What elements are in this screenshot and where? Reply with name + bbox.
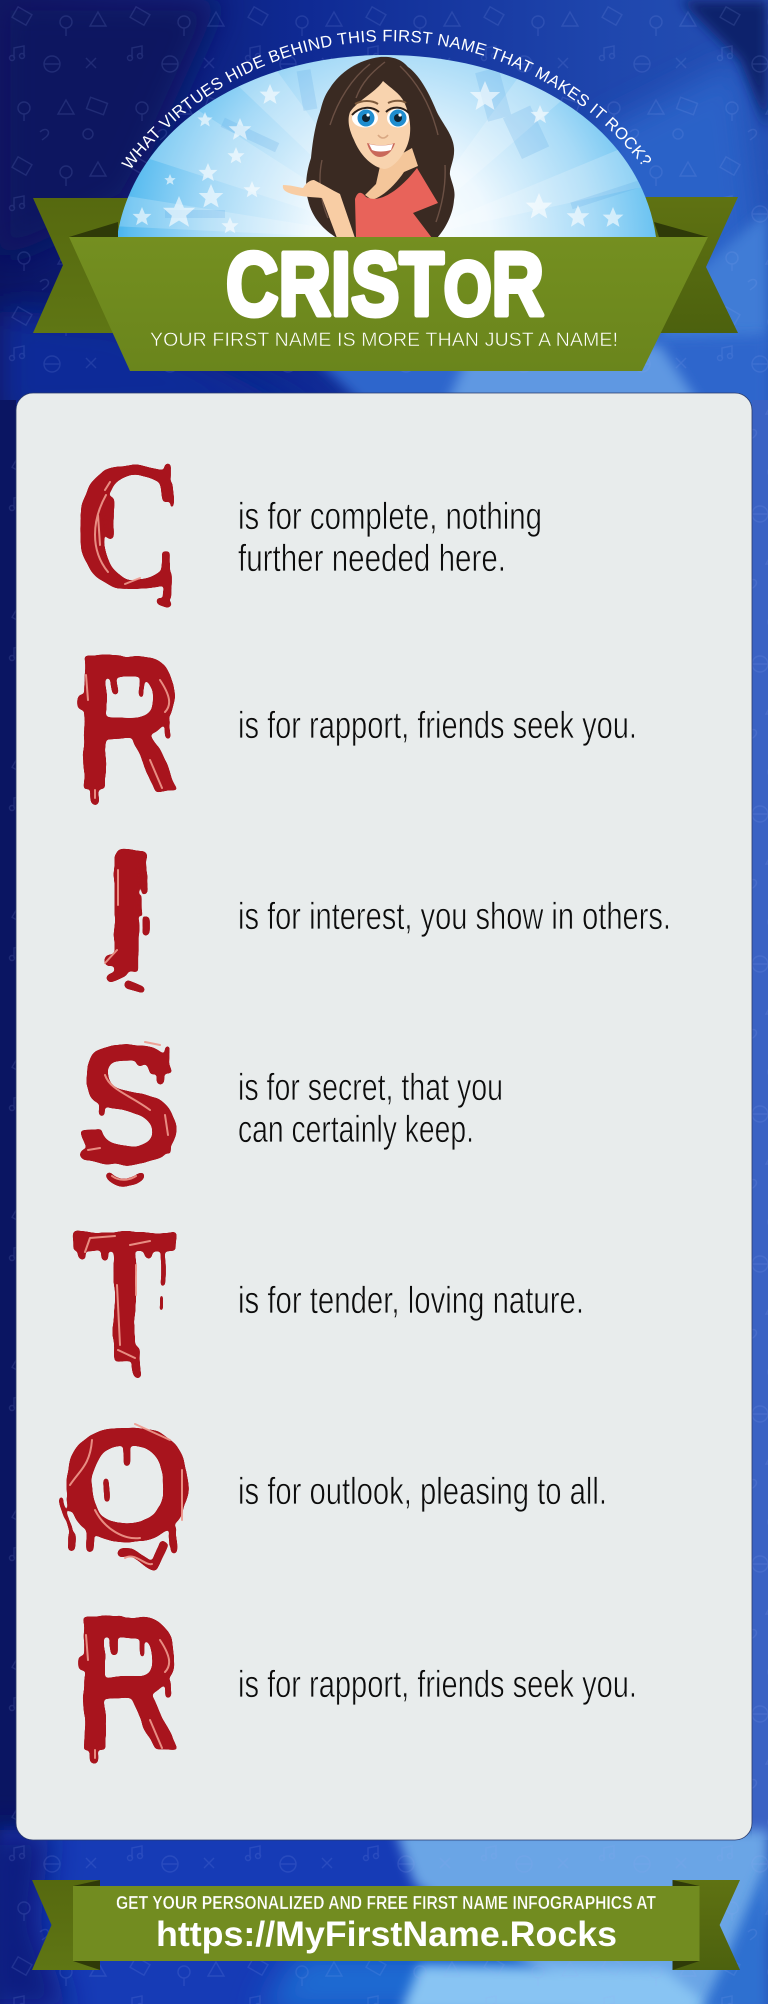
letter R: R (74, 614, 182, 831)
subtitle: YOUR FIRST NAME IS MORE THAN JUST A NAME! (150, 329, 618, 351)
text (238, 496, 542, 580)
text: is for secret, that you (238, 1067, 503, 1109)
footer url: https://MyFirstName.Rocks (156, 1915, 617, 1954)
ribbon folds (69, 222, 118, 237)
arm and hand (283, 180, 355, 238)
panel background (16, 393, 752, 1840)
right ribbon tail (620, 197, 738, 333)
banner band (69, 237, 708, 371)
left ribbon tail (33, 198, 150, 333)
nose (378, 135, 388, 138)
name title: CRISTOR (226, 235, 544, 335)
row: R (74, 614, 637, 831)
footer ribbon (32, 1880, 740, 1970)
sunburst dome (118, 55, 656, 237)
hair (306, 57, 455, 238)
row: S (76, 1008, 503, 1199)
footer band (73, 1886, 700, 1961)
text: is for rapport, friends seek you. (238, 1664, 637, 1706)
row: T (72, 1196, 584, 1399)
text: can certainly keep. (238, 1109, 474, 1151)
letter R: R (74, 1574, 182, 1791)
letter I: I (103, 819, 150, 1009)
text: is for rapport, friends seek you. (238, 705, 637, 747)
text: is for outlook, pleasing to all. (238, 1471, 607, 1513)
text (238, 1067, 503, 1151)
shirt (355, 168, 438, 238)
character: woman presenting (283, 57, 455, 238)
header banner (69, 222, 708, 371)
neck and chest (365, 148, 418, 200)
eyes (352, 101, 409, 128)
footer call to action: GET YOUR PERSONALIZED AND FREE FIRST NAME INFOGRAPHICS AT (116, 1892, 657, 1913)
row: I (103, 819, 671, 1009)
row: C (72, 423, 542, 628)
text: is for complete, nothing (238, 496, 542, 538)
row: R again (74, 1574, 637, 1791)
letter S: S (76, 1008, 181, 1199)
panel: letters (16, 393, 752, 1840)
letter T: T (72, 1196, 177, 1399)
face (349, 81, 410, 169)
text: further needed here. (238, 538, 506, 580)
row: O (59, 1394, 607, 1576)
letter C: C (72, 423, 182, 628)
letter O: O (59, 1394, 197, 1576)
text: is for tender, loving nature. (238, 1280, 584, 1322)
footer left tail (32, 1880, 100, 1970)
mouth (367, 143, 395, 157)
footer right tail (672, 1880, 740, 1970)
header ribbon tails (33, 197, 738, 333)
arched tagline: WHAT VIRTUES HIDE BEHIND THIS FIRST NAME THAT MAKES IT ROCK? (121, 30, 651, 168)
